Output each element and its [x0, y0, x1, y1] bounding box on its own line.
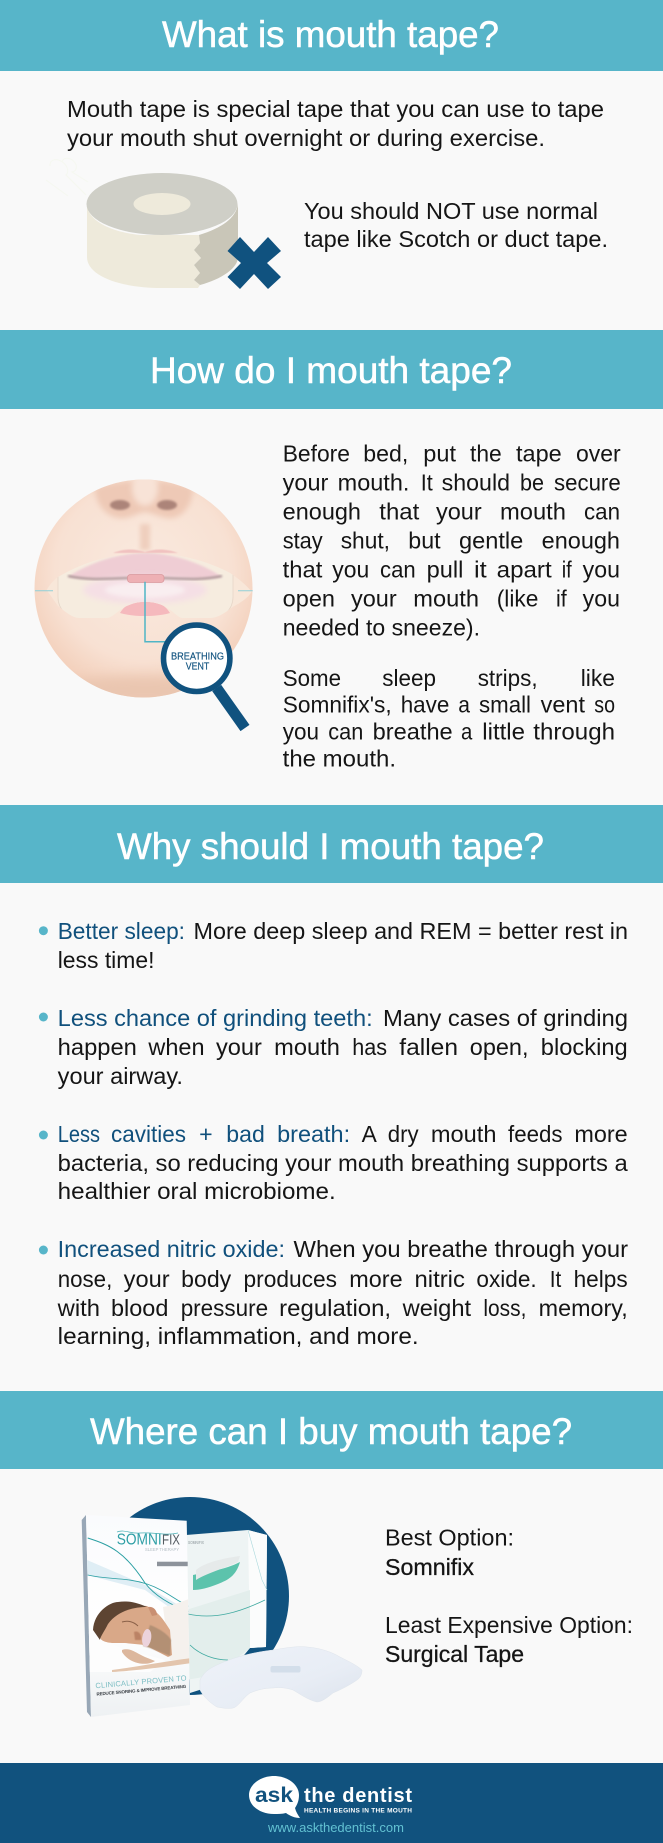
panel: where can I buy mouth tape — [0, 1391, 663, 1717]
bullet: less cavities and bad breath: bacteria, so reducing your mouth breathing supports a — [58, 1150, 628, 1176]
icon: navy X — [228, 237, 281, 289]
bullet: better sleep — [39, 918, 628, 973]
text: how to apply: can — [584, 498, 620, 524]
text: about vented sleep strips: a — [461, 718, 472, 744]
heading: how do I mouth tape: How do I mouth tape? — [150, 350, 512, 391]
logo: ask the dentist — [249, 1776, 412, 1818]
text: about vented sleep strips: the mouth. — [283, 746, 396, 772]
bullet: less cavities and bad breath: + — [199, 1121, 213, 1147]
bullet: less cavities and bad breath: Less — [58, 1121, 100, 1147]
text: about vented sleep strips: sleep — [382, 665, 436, 691]
text: about vented sleep strips — [283, 665, 615, 772]
bullet: less cavities and bad breath: bad — [226, 1121, 265, 1147]
bullet: less cavities and bad breath: breath: — [277, 1121, 350, 1147]
icon: magnifier breathing vent — [164, 625, 245, 728]
bullet: increased nitric oxide: When you breathe through your — [294, 1236, 628, 1262]
text: definition of mouth tape: Mouth tape is special tape that you can use to tape — [67, 96, 604, 122]
text: do not use normal tape — [304, 198, 608, 252]
logo: ask the dentist: the dentist — [304, 1785, 412, 1807]
bullet: increased nitric oxide: regulation, — [279, 1295, 391, 1321]
heading: where can I buy mouth tape — [0, 1391, 663, 1469]
bullet: increased nitric oxide: nitric — [414, 1266, 465, 1292]
panel: how do I mouth tape — [0, 330, 663, 772]
bullet: less cavities and bad breath: healthier oral microbiome. — [58, 1178, 336, 1204]
illustration: Somnifix product: SLEEP THERAPY — [145, 1547, 179, 1552]
illustration: face with mouth strip — [34, 470, 253, 704]
text: how to apply: if — [556, 585, 567, 611]
text: how to apply: mouth. — [338, 470, 409, 496]
panel: what is mouth tape — [0, 0, 663, 289]
bullet: increased nitric oxide: your — [124, 1266, 170, 1292]
bullet: less cavities and bad breath: cavities — [111, 1121, 186, 1147]
text: about vented sleep strips: a — [458, 692, 470, 718]
bullet: less cavities and bad breath: A — [362, 1121, 377, 1147]
text: how to apply: be — [520, 470, 544, 496]
bullet: increased nitric oxide — [39, 1236, 628, 1349]
bullet: less cavities and bad breath: feeds — [508, 1121, 562, 1147]
heading: what is mouth tape: What is mouth tape? — [162, 14, 499, 55]
text: how to apply: tape — [516, 441, 562, 467]
footer — [0, 1763, 663, 1843]
text: how to apply: if — [562, 556, 572, 582]
text: best option: Somnifix — [385, 1554, 474, 1580]
text: how to apply: (like — [497, 585, 538, 611]
text: how to apply: gentle — [459, 527, 523, 553]
bullet: better sleep: More deep sleep and REM = better rest in — [194, 918, 628, 944]
text: how to apply: open — [283, 585, 335, 611]
icon: magnifier breathing vent: BREATHING — [171, 651, 224, 662]
text: how to apply: enough — [283, 498, 361, 524]
bullet: less cavities and bad breath: mouth — [431, 1121, 496, 1147]
bullet: less chance of grinding teeth: Many cases of grinding — [383, 1005, 628, 1031]
bullet: increased nitric oxide: nose, — [58, 1266, 112, 1292]
bullet: less chance of grinding teeth: happen — [58, 1034, 137, 1060]
text: least expensive option — [385, 1612, 633, 1667]
panel: why should I mouth tape — [0, 805, 663, 1349]
text: how to apply: that — [379, 498, 420, 524]
text: how to apply: your — [283, 470, 329, 496]
text: do not use normal tape: tape like Scotch or duct tape. — [304, 226, 608, 252]
text: how to apply: but — [408, 527, 441, 553]
logo: ask the dentist: HEALTH BEGINS IN THE MOUTH — [304, 1808, 412, 1815]
text: how to apply: that — [283, 556, 323, 582]
illustration: Somnifix product — [82, 1497, 362, 1717]
text: how to apply: your — [351, 585, 397, 611]
text: about vented sleep strips: like — [581, 665, 615, 691]
bullet: increased nitric oxide: helps — [574, 1266, 628, 1292]
bullet: less chance of grinding teeth: open, — [470, 1034, 528, 1060]
bullet: less chance of grinding teeth: fallen — [399, 1034, 458, 1060]
text: best option: Best Option: — [385, 1525, 514, 1551]
bullet: less cavities and bad breath — [39, 1121, 628, 1204]
text: how to apply: enough — [542, 527, 620, 553]
icon: roll of tape — [46, 158, 238, 288]
illustration: Somnifix product: REDUCE SNORING & IMPROVE BREATHING — [96, 1684, 187, 1697]
bullet: increased nitric oxide: memory, — [539, 1295, 628, 1321]
text: about vented sleep strips: little — [482, 718, 525, 744]
heading: where can I buy mouth tape: Where can I buy mouth tape? — [90, 1411, 572, 1452]
heading: why should I mouth tape: Why should I mouth tape? — [117, 826, 544, 867]
bullet: increased nitric oxide: It — [550, 1266, 562, 1292]
bullet: less cavities and bad breath: more — [574, 1121, 628, 1147]
bullet: increased nitric oxide: body — [181, 1266, 232, 1292]
bullet: less cavities and bad breath: dry — [388, 1121, 419, 1147]
bullet: increased nitric oxide: Increased nitric oxide: — [58, 1236, 285, 1262]
text: least expensive option: Surgical Tape — [385, 1641, 524, 1667]
bullet: increased nitric oxide: produces — [244, 1266, 337, 1292]
illustration: Somnifix product: FIX — [162, 1531, 180, 1548]
text: website: www.askthedentist.com — [267, 1820, 404, 1835]
text: how to apply: you — [583, 585, 620, 611]
logo: ask the dentist: ask — [255, 1784, 293, 1807]
heading: why should I mouth tape — [0, 805, 663, 883]
bullet: better sleep: less time! — [58, 947, 155, 973]
text: about vented sleep strips: you — [283, 718, 319, 744]
text: about vented sleep strips: so — [594, 692, 615, 718]
bullet: less chance of grinding teeth: when — [147, 1034, 204, 1060]
bullet: increased nitric oxide: more — [349, 1266, 403, 1292]
bullet: better sleep: Better sleep: — [58, 918, 185, 944]
heading: what is mouth tape — [0, 0, 663, 71]
illustration: Somnifix product: CLINICALLY PROVEN TO — [95, 1673, 187, 1690]
text: how to apply: the — [470, 441, 502, 467]
text: how to apply — [283, 441, 621, 640]
bullet: increased nitric oxide: learning, inflammation, and more. — [58, 1323, 419, 1349]
text: definition of mouth tape — [67, 96, 604, 151]
bullet: increased nitric oxide: pressure — [181, 1295, 268, 1321]
text: how to apply: It — [421, 470, 433, 496]
text: how to apply: pull — [427, 556, 463, 582]
illustration: Somnifix product: SOMNI — [117, 1531, 162, 1548]
text: about vented sleep strips: strips, — [478, 665, 538, 691]
text: about vented sleep strips: Some — [283, 665, 341, 691]
text: how to apply: shut, — [341, 527, 390, 553]
text: definition of mouth tape: your mouth shut overnight or during exercise. — [67, 125, 545, 151]
bullet: increased nitric oxide: with — [57, 1295, 100, 1321]
text: about vented sleep strips: through — [533, 718, 615, 744]
bullet: increased nitric oxide: blood — [111, 1295, 168, 1321]
bullet: less chance of grinding teeth: has — [352, 1034, 387, 1060]
illustration: Somnifix product: SOMNIFIX — [188, 1540, 204, 1545]
bullet: increased nitric oxide: weight — [402, 1295, 472, 1321]
bullet: increased nitric oxide: oxide. — [476, 1266, 537, 1292]
text: how to apply: mouth — [413, 585, 479, 611]
bullet: less chance of grinding teeth: your airway. — [58, 1063, 183, 1089]
text: about vented sleep strips: have — [401, 692, 449, 718]
heading: how do I mouth tape — [0, 330, 663, 409]
text: how to apply: secure — [554, 470, 621, 496]
text: how to apply: Before — [283, 441, 350, 467]
text: how to apply: can — [380, 556, 416, 582]
text: how to apply: you — [583, 556, 620, 582]
text: about vented sleep strips: Somnifix's, — [283, 692, 392, 718]
text: best option — [385, 1525, 514, 1580]
text: about vented sleep strips: breathe — [373, 718, 453, 744]
text: how to apply: it — [474, 556, 487, 582]
text: how to apply: you — [332, 556, 369, 582]
bullet: less chance of grinding teeth: your — [216, 1034, 262, 1060]
bullet: increased nitric oxide: loss, — [483, 1295, 526, 1321]
text: how to apply: bed, — [363, 441, 408, 467]
text: how to apply: your — [436, 498, 482, 524]
text: least expensive option: Least Expensive Option: — [385, 1612, 633, 1638]
bullet: less chance of grinding teeth — [39, 1005, 628, 1089]
bullet: less chance of grinding teeth: mouth — [274, 1034, 340, 1060]
text: how to apply: over — [576, 441, 621, 467]
text: how to apply: needed to sneeze). — [283, 614, 480, 640]
text: about vented sleep strips: small — [479, 692, 531, 718]
text: how to apply: should — [442, 470, 510, 496]
bullet: less chance of grinding teeth: Less chance of grinding teeth: — [58, 1005, 373, 1031]
text: how to apply: stay — [283, 527, 323, 553]
text: how to apply: mouth — [500, 498, 566, 524]
text: how to apply: put — [423, 441, 457, 467]
text: about vented sleep strips: can — [328, 718, 363, 744]
bullet: less chance of grinding teeth: blocking — [541, 1034, 628, 1060]
text: how to apply: apart — [497, 556, 552, 582]
icon: magnifier breathing vent: VENT — [186, 661, 209, 672]
text: about vented sleep strips: vent — [541, 692, 586, 718]
text: do not use normal tape: You should NOT use normal — [304, 198, 598, 224]
